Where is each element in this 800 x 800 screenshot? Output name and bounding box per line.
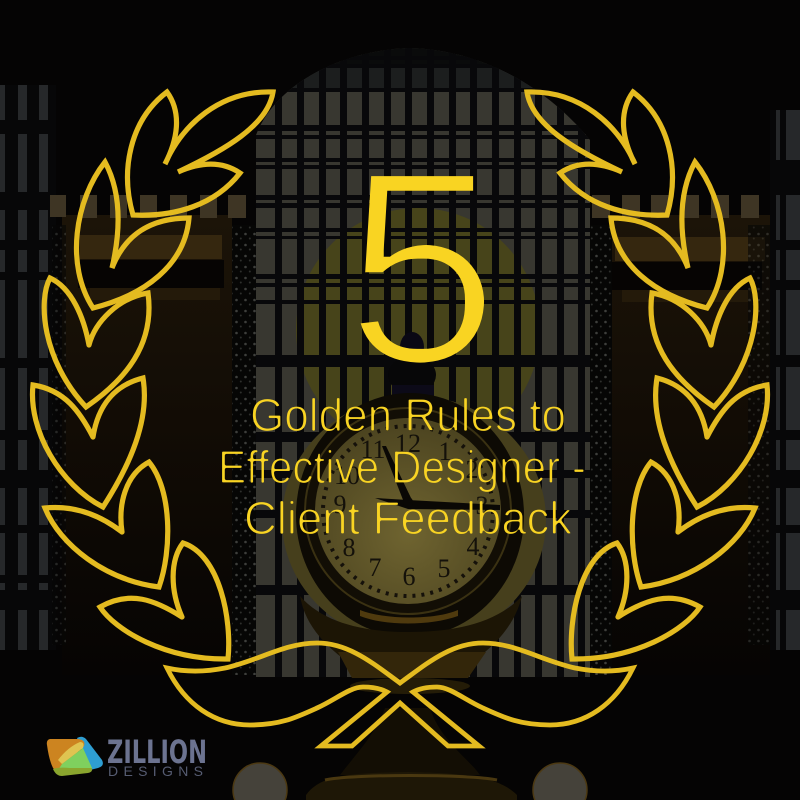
leaf 6 bbox=[571, 543, 700, 659]
clock numerals: 6 bbox=[402, 562, 416, 591]
title text bbox=[218, 389, 586, 544]
logo wordmark: ZILLION bbox=[107, 733, 207, 771]
leaf 2 bbox=[76, 162, 189, 308]
clock numerals: 9 bbox=[334, 490, 346, 519]
clock numerals: 1 bbox=[438, 437, 452, 466]
clock numerals: 10 bbox=[334, 461, 360, 490]
title text: Golden Rules to bbox=[250, 389, 566, 441]
clock globe bbox=[282, 393, 546, 644]
big number 5: 5 bbox=[345, 114, 499, 422]
clock numerals: 5 bbox=[438, 554, 450, 583]
logo subtitle: DESIGNS bbox=[108, 763, 203, 779]
leaf 1 bbox=[527, 92, 672, 215]
leaf 5 bbox=[45, 462, 168, 587]
leaf 3 bbox=[651, 278, 756, 407]
leaf 5 bbox=[632, 462, 755, 587]
leaf 3 bbox=[44, 278, 149, 407]
title text: Effective Designer - bbox=[218, 441, 586, 493]
stone pillar left bbox=[50, 195, 246, 675]
clock tower silhouette bbox=[388, 332, 436, 407]
clock numerals: 11 bbox=[360, 435, 386, 464]
lamp left bbox=[233, 763, 287, 800]
leaf 6 bbox=[100, 543, 229, 659]
Zillion Designs logo bbox=[47, 733, 207, 779]
logo mark bbox=[47, 737, 103, 776]
clock numerals: 4 bbox=[466, 532, 480, 561]
clock numerals: 12 bbox=[395, 429, 421, 458]
clock numerals: 2 bbox=[466, 455, 478, 484]
laurel wreath right branch bbox=[527, 92, 768, 659]
leaf 1 bbox=[128, 92, 273, 215]
stone pillar right bbox=[592, 195, 770, 675]
clock numerals: 8 bbox=[342, 533, 356, 562]
clock numerals bbox=[334, 429, 488, 591]
clock numerals: 3 bbox=[476, 491, 488, 520]
laurel wreath left branch bbox=[32, 92, 273, 659]
leaf 4 bbox=[656, 378, 768, 507]
right side window bbox=[770, 110, 800, 650]
clock hands bbox=[375, 446, 500, 510]
lamp right bbox=[533, 763, 587, 800]
leaf 4 bbox=[32, 378, 144, 507]
ornate window columns bbox=[52, 225, 770, 675]
leaf 2 bbox=[611, 162, 724, 308]
clock bronze base bbox=[300, 596, 522, 800]
clock numerals: 7 bbox=[368, 553, 382, 582]
title text: Client Feedback bbox=[244, 492, 573, 544]
ribbon at base of wreath bbox=[167, 643, 633, 746]
left side window bbox=[0, 85, 56, 650]
central arched window grid bbox=[256, 15, 590, 683]
